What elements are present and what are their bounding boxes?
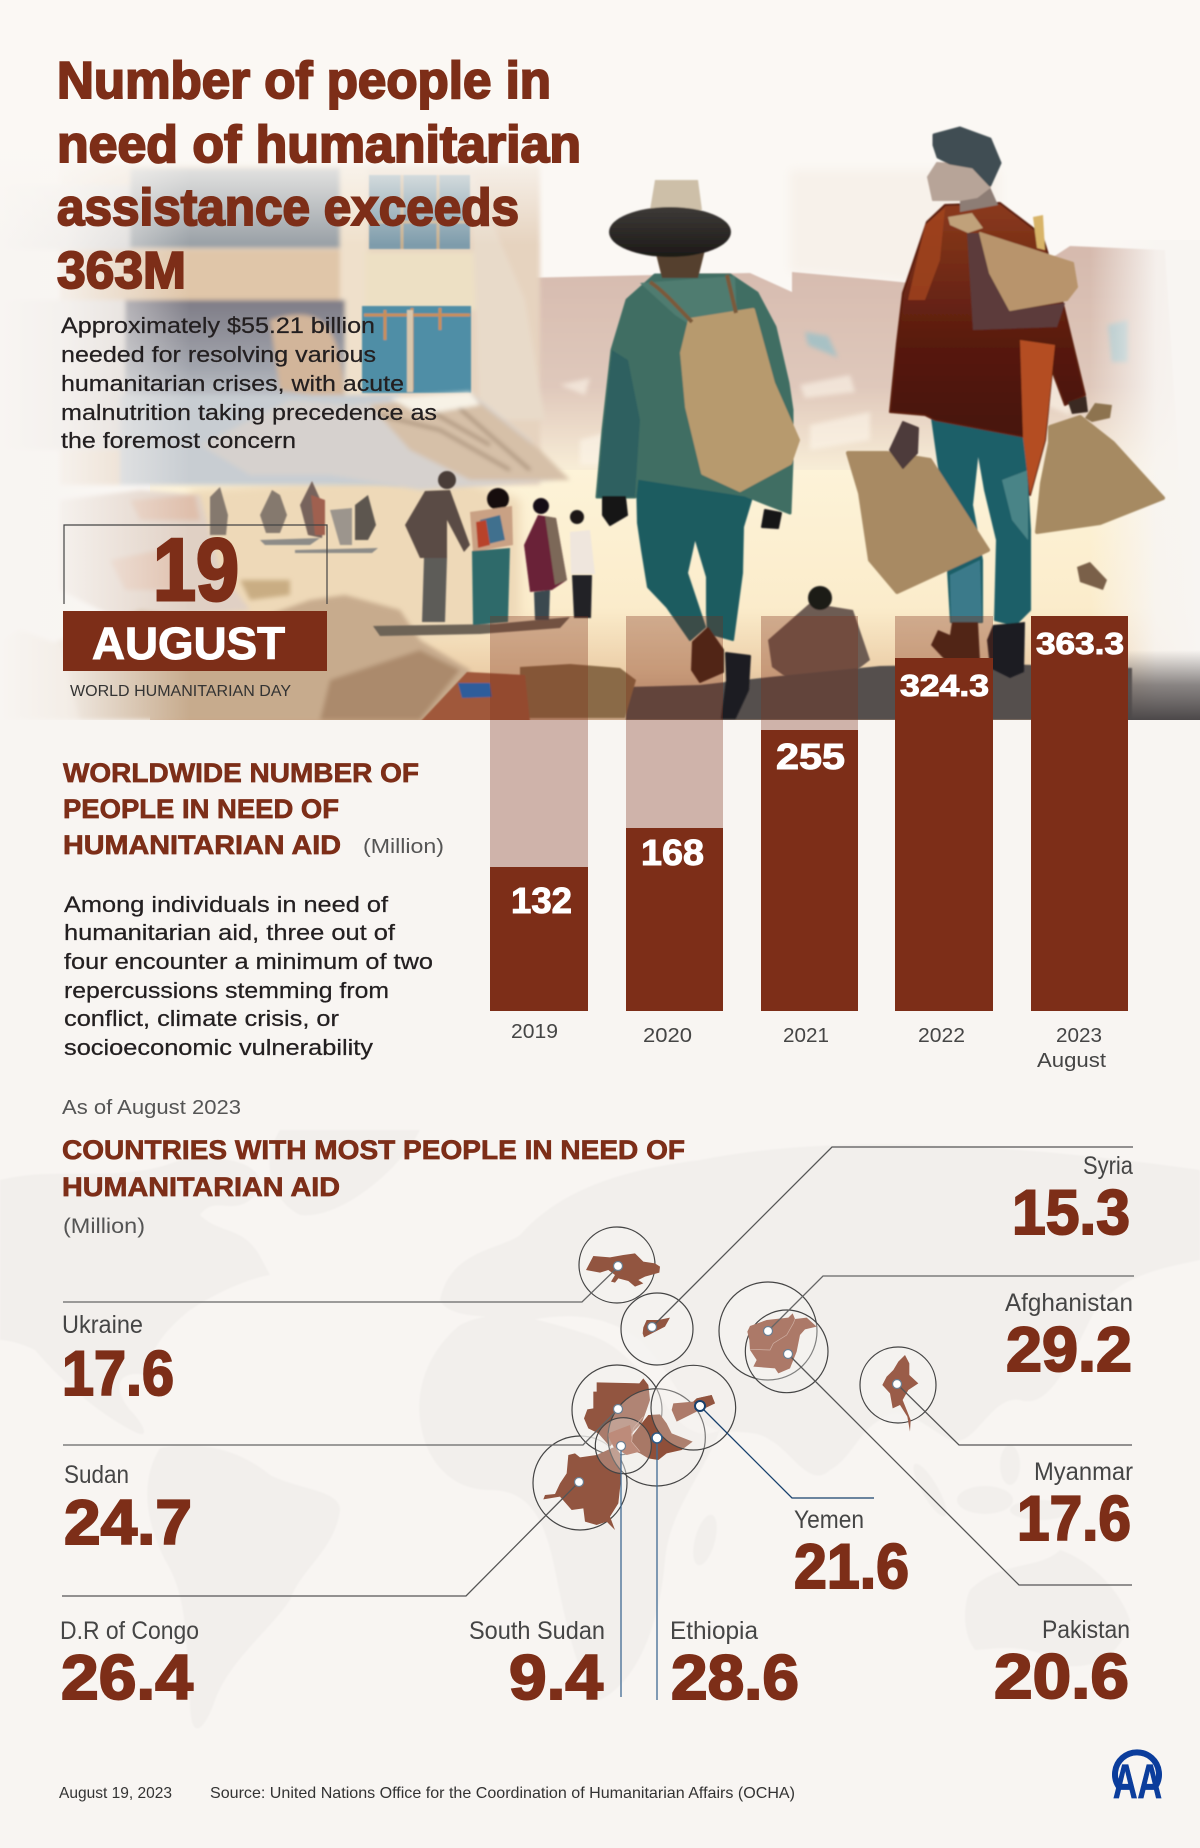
chart description: four encounter a minimum of two <box>64 949 433 974</box>
stat: Ethiopia: Ethiopia <box>670 1617 758 1645</box>
stat: Yemen <box>794 1506 909 1602</box>
stat: Ethiopia <box>670 1617 799 1713</box>
chart heading: WORLDWIDE NUMBER OF <box>63 758 419 788</box>
DR Congo shape <box>543 1447 622 1530</box>
countries heading: COUNTRIES WITH MOST PEOPLE IN NEED OF <box>62 1135 685 1165</box>
title: need of humanitarian <box>57 116 581 174</box>
right sack <box>1037 417 1163 532</box>
stat: Syria: Syria <box>1083 1152 1133 1180</box>
burlap sack <box>682 310 798 490</box>
stat: Ukraine: 17.6 <box>62 1339 174 1409</box>
wall weathering specks <box>560 375 1075 465</box>
left sack <box>848 453 988 592</box>
bar 2021: 2021 <box>783 1025 829 1047</box>
South Sudan circle <box>595 1418 651 1474</box>
subtitle: malnutrition taking precedence as <box>61 400 437 425</box>
trousers <box>932 418 1030 625</box>
stat: Myanmar: 17.6 <box>1017 1484 1131 1554</box>
bar 2023 August: 363.3 <box>1036 626 1124 661</box>
subtitle <box>61 313 437 453</box>
Syria shape <box>643 1318 670 1337</box>
date badge: 19 August: 19 <box>153 520 239 619</box>
country locator circles and shapes <box>533 1227 936 1530</box>
Afghanistan and Pakistan shape <box>747 1313 817 1373</box>
stat: Ethiopia: 28.6 <box>671 1643 799 1713</box>
stat: DR Congo: D.R of Congo <box>60 1617 199 1645</box>
stat: Pakistan: 20.6 <box>994 1642 1129 1712</box>
bar 2023 August: 2023 <box>1056 1025 1102 1047</box>
stat: Afghanistan: 29.2 <box>1006 1315 1132 1385</box>
bar 2022 <box>895 616 993 1047</box>
countries heading: HUMANITARIAN AID <box>62 1172 340 1202</box>
chart description: Among individuals in need of <box>64 892 389 917</box>
bar 2021: 255 <box>776 736 845 777</box>
subtitle: humanitarian crises, with acute <box>61 371 404 396</box>
Ukraine shape <box>586 1253 660 1287</box>
logo: AA: AA <box>1113 1756 1162 1809</box>
bar 2020 <box>626 616 723 1047</box>
stat: DR Congo <box>60 1617 199 1713</box>
trousers <box>637 478 752 640</box>
Pakistan circle <box>745 1310 828 1393</box>
head <box>928 163 990 200</box>
bar 2019: 2019 <box>511 1021 558 1043</box>
chart description: humanitarian aid, three out of <box>64 920 396 945</box>
stat: Sudan: Sudan <box>64 1461 129 1489</box>
chart heading: PEOPLE IN NEED OF <box>63 794 339 824</box>
sand path between rubble <box>190 484 523 625</box>
bar 2019: 132 <box>511 880 572 921</box>
chart description: repercussions stemming from <box>64 978 389 1003</box>
date badge: 19 August: AUGUST <box>92 618 285 669</box>
subtitle: needed for resolving various <box>61 342 376 367</box>
stat: Sudan: 24.7 <box>64 1488 192 1558</box>
rubble pile <box>60 392 570 620</box>
stat: Myanmar: Myanmar <box>1034 1458 1133 1486</box>
stat: DR Congo: 26.4 <box>61 1643 193 1713</box>
chart heading: (Million) <box>363 836 444 858</box>
neck <box>655 250 705 278</box>
satchel <box>948 213 983 233</box>
ruined building <box>62 166 542 488</box>
stat: Sudan <box>64 1461 192 1558</box>
stat: Afghanistan: Afghanistan <box>1005 1289 1133 1317</box>
as-of note: As of August 2023 <box>62 1097 241 1119</box>
chart heading <box>63 758 444 860</box>
jacket <box>890 203 1085 495</box>
shoes <box>692 628 723 682</box>
subtitle: the foremost concern <box>61 428 296 453</box>
stat: Yemen: 21.6 <box>794 1532 909 1602</box>
stat: South Sudan: South Sudan <box>469 1617 605 1645</box>
right hand <box>1068 396 1088 414</box>
South Sudan shape <box>608 1425 640 1455</box>
country location dots <box>574 1262 902 1486</box>
stat: South Sudan <box>469 1617 605 1713</box>
Ethiopia circle <box>608 1389 705 1486</box>
date badge: 19 August: WORLD HUMANITARIAN DAY <box>70 683 291 700</box>
chart description <box>64 892 433 1060</box>
title: Number of people in <box>57 52 551 110</box>
stat: Pakistan: Pakistan <box>1042 1616 1130 1644</box>
Sudan shape <box>584 1378 650 1447</box>
figure in maroon cloak <box>524 498 567 620</box>
Yemen shape <box>672 1395 715 1422</box>
Ethiopia shape <box>632 1414 693 1460</box>
stat: Ukraine: Ukraine <box>62 1311 143 1339</box>
hero illustration: people walking through ruins <box>48 126 1200 720</box>
countries heading: (Million) <box>63 1215 145 1238</box>
distant walkers <box>210 481 378 553</box>
small rock <box>1077 562 1107 590</box>
figure in teal skirt <box>470 488 513 625</box>
bar 2020: 168 <box>641 832 704 873</box>
sandy ground <box>150 470 1200 720</box>
building windows <box>362 175 471 393</box>
bar 2023 August <box>1031 616 1128 1072</box>
group of four figures <box>373 471 595 636</box>
stat: Syria: 15.3 <box>1012 1178 1130 1248</box>
Myanmar shape <box>882 1355 918 1432</box>
pale building behind figures <box>794 174 996 278</box>
brown rubble and clothing <box>420 664 636 722</box>
Yemen circle <box>651 1365 736 1450</box>
hands <box>603 497 627 525</box>
green shirt <box>597 275 792 513</box>
seated figure <box>768 586 870 680</box>
bar 2023 August: August <box>1037 1050 1106 1072</box>
bar 2022: 2022 <box>918 1025 965 1047</box>
chart heading: HUMANITARIAN AID <box>63 830 341 860</box>
bar 2021 <box>761 616 858 1047</box>
figure with backpack <box>405 471 470 622</box>
footer source: Source: United Nations Office for the Coordination of Humanitarian Affairs (OCHA) <box>210 1785 795 1802</box>
footer date: August 19, 2023 <box>59 1785 172 1802</box>
hero edge fades <box>0 120 1200 720</box>
child in white shirt <box>570 510 595 618</box>
ground shadow of group <box>373 617 570 636</box>
stat: Yemen: Yemen <box>794 1506 864 1534</box>
large figure with satchel <box>848 128 1163 678</box>
bar 2020: 2020 <box>643 1025 692 1047</box>
neck <box>960 187 998 212</box>
stat: South Sudan: 9.4 <box>509 1643 603 1713</box>
boots <box>931 622 980 660</box>
date badge: 19 August <box>63 520 327 700</box>
hat brim <box>609 207 731 257</box>
left hand <box>890 422 918 468</box>
bar 2022: 324.3 <box>900 668 989 703</box>
bar chart: people in need by year <box>490 616 1128 1072</box>
stat: Afghanistan <box>1005 1289 1133 1385</box>
hat crown <box>650 180 702 210</box>
logo: AA <box>1113 1752 1162 1809</box>
subtitle: Approximately $55.21 billion <box>61 313 375 338</box>
leader lines <box>62 1147 1134 1700</box>
chart description: conflict, climate crisis, or <box>64 1006 339 1031</box>
large figure with hat <box>597 180 798 718</box>
title <box>57 52 581 300</box>
right edge fade of background <box>1098 248 1200 710</box>
countries heading <box>62 1135 685 1238</box>
bar 2019 <box>490 616 588 1043</box>
title: assistance exceeds <box>57 179 519 237</box>
chart description: socioeconomic vulnerability <box>64 1035 373 1060</box>
stat: Ukraine <box>62 1311 174 1409</box>
pink wall behind figures <box>538 245 1155 470</box>
foreground rocks <box>0 580 470 720</box>
ground shadow <box>626 664 1132 720</box>
world map background <box>0 1130 1200 1728</box>
title: 363M <box>57 242 186 300</box>
hair <box>934 128 1000 185</box>
stat: Pakistan <box>994 1616 1130 1712</box>
